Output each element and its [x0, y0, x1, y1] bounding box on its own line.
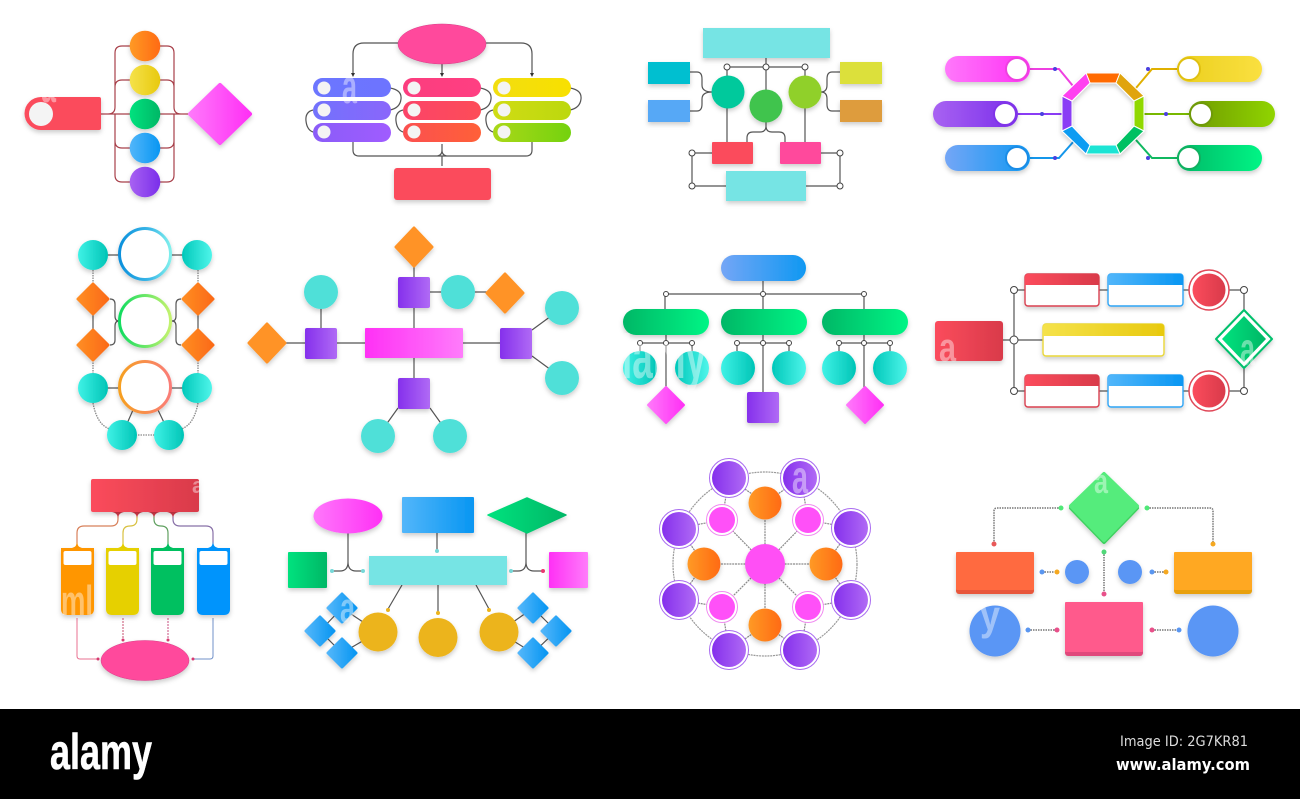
connector dots	[992, 506, 1216, 632]
pill column 3	[493, 78, 571, 142]
watermark letter: a	[342, 61, 357, 114]
amber box	[1174, 552, 1252, 594]
right pill knobs	[1178, 58, 1212, 169]
upper connectors	[77, 512, 213, 548]
magenta diamond	[190, 85, 250, 143]
green pills	[623, 309, 908, 335]
central node	[745, 544, 785, 584]
connector lines	[640, 281, 890, 405]
loop connectors	[306, 88, 581, 132]
red header box	[91, 479, 199, 512]
octagon ring segments	[1062, 73, 1144, 154]
turquoise bottom box	[726, 171, 806, 201]
connector lines	[332, 533, 543, 613]
solid connectors	[93, 255, 198, 435]
arrow tips	[351, 73, 534, 77]
magenta square	[549, 552, 588, 588]
green decision diamond	[1216, 310, 1272, 368]
turquoise top box	[703, 28, 830, 58]
connector tips	[96, 638, 194, 660]
lower cards	[1025, 375, 1183, 407]
pink ellipse	[101, 640, 189, 680]
panel: hierarchy with circles and boxes	[648, 28, 882, 201]
large rings	[120, 228, 170, 412]
blue box	[402, 497, 474, 533]
left pill knobs	[994, 58, 1028, 169]
curly braces	[110, 299, 181, 345]
watermark letters: ml	[61, 577, 93, 624]
pink box	[1065, 602, 1143, 656]
connector brackets	[101, 46, 189, 182]
lower connectors	[77, 618, 213, 659]
panel: card process flow	[935, 270, 1272, 411]
watermark letter: a	[340, 584, 355, 631]
watermark letters: a	[939, 326, 957, 370]
teal circles	[78, 240, 212, 450]
watermark letter: a	[792, 451, 808, 503]
blue diamonds	[306, 594, 570, 667]
connector nodes	[1010, 286, 1248, 394]
green decision diamond	[1071, 474, 1137, 542]
dotted connectors	[994, 508, 1213, 630]
watermark letter on diamond: a	[1240, 323, 1255, 375]
panel: circle bracket flow	[24, 31, 250, 197]
magenta ellipse	[314, 498, 382, 534]
panel: octagon with six pills	[933, 56, 1275, 171]
footer logo: alamy	[50, 724, 152, 780]
pill column 1	[313, 78, 391, 142]
magenta centre box	[365, 328, 463, 358]
panel: ellipse and pill list flow	[306, 24, 581, 200]
yellow tube	[106, 548, 139, 615]
connector dots	[330, 549, 545, 615]
pink ellipse	[398, 24, 486, 64]
green square	[288, 552, 327, 588]
turquoise centre box	[369, 556, 507, 585]
red result box	[394, 168, 491, 200]
red and pink boxes	[712, 142, 821, 164]
orange nodes	[688, 486, 842, 642]
panel: decision tree with dots	[956, 463, 1252, 656]
outer ring	[673, 472, 857, 656]
panel: central box with assorted shapes	[288, 497, 588, 667]
connector lines	[267, 247, 562, 436]
start tab knob	[29, 102, 53, 126]
green tube	[151, 548, 184, 615]
blue tube	[197, 548, 230, 615]
magenta inner nodes	[706, 504, 824, 622]
purple outer nodes	[660, 458, 870, 670]
connector nodes	[638, 292, 892, 346]
watermark word: lamy	[622, 323, 706, 392]
watermark letter on blue circle: y	[980, 592, 1001, 639]
watermark fragment: a	[41, 60, 56, 113]
coloured circles	[130, 31, 160, 197]
orange tube	[61, 548, 94, 615]
upper cards	[1025, 274, 1183, 306]
connector lines	[1018, 69, 1190, 158]
side boxes	[648, 62, 882, 122]
connector lines	[690, 58, 840, 186]
panel: rings, diamonds and circles chain	[78, 228, 213, 450]
top blue pill	[721, 255, 806, 281]
footer band	[0, 709, 1300, 799]
central circles	[712, 76, 822, 122]
footer website: www.alamy.com	[1116, 755, 1250, 774]
dotted connectors	[93, 270, 198, 435]
panel: radial network	[660, 451, 870, 670]
pill column 2	[403, 78, 481, 142]
connector lines	[353, 43, 532, 166]
footer image id: Image ID: 2G7KR81	[1120, 734, 1248, 750]
orange red box	[956, 552, 1034, 594]
yellow card	[1043, 324, 1164, 356]
blue circles	[970, 560, 1238, 656]
green diamond	[488, 498, 566, 533]
teal circles	[304, 275, 579, 453]
panel: tube columns flow	[61, 473, 230, 680]
purple squares	[305, 277, 532, 409]
connector fillets	[72, 512, 218, 548]
red start box	[935, 321, 1003, 361]
connector lines	[1003, 290, 1244, 391]
connector nodes	[689, 64, 843, 189]
orange diamonds	[249, 228, 523, 362]
panel: central box radial map	[249, 228, 579, 453]
panel: three branch org chart	[622, 255, 908, 423]
spokes	[679, 478, 851, 650]
yellow circles	[358, 612, 518, 657]
red start tab	[24, 97, 101, 130]
teal circles	[623, 351, 907, 385]
right pills	[1177, 56, 1275, 171]
left pills	[933, 56, 1030, 171]
bottom shapes	[648, 387, 883, 423]
diamond links	[320, 608, 556, 653]
connector dots	[1040, 67, 1168, 160]
orange diamonds	[78, 284, 213, 360]
red target circles	[1189, 270, 1229, 411]
watermark letters: a	[1094, 463, 1109, 501]
watermark letter on header: a	[192, 473, 205, 498]
